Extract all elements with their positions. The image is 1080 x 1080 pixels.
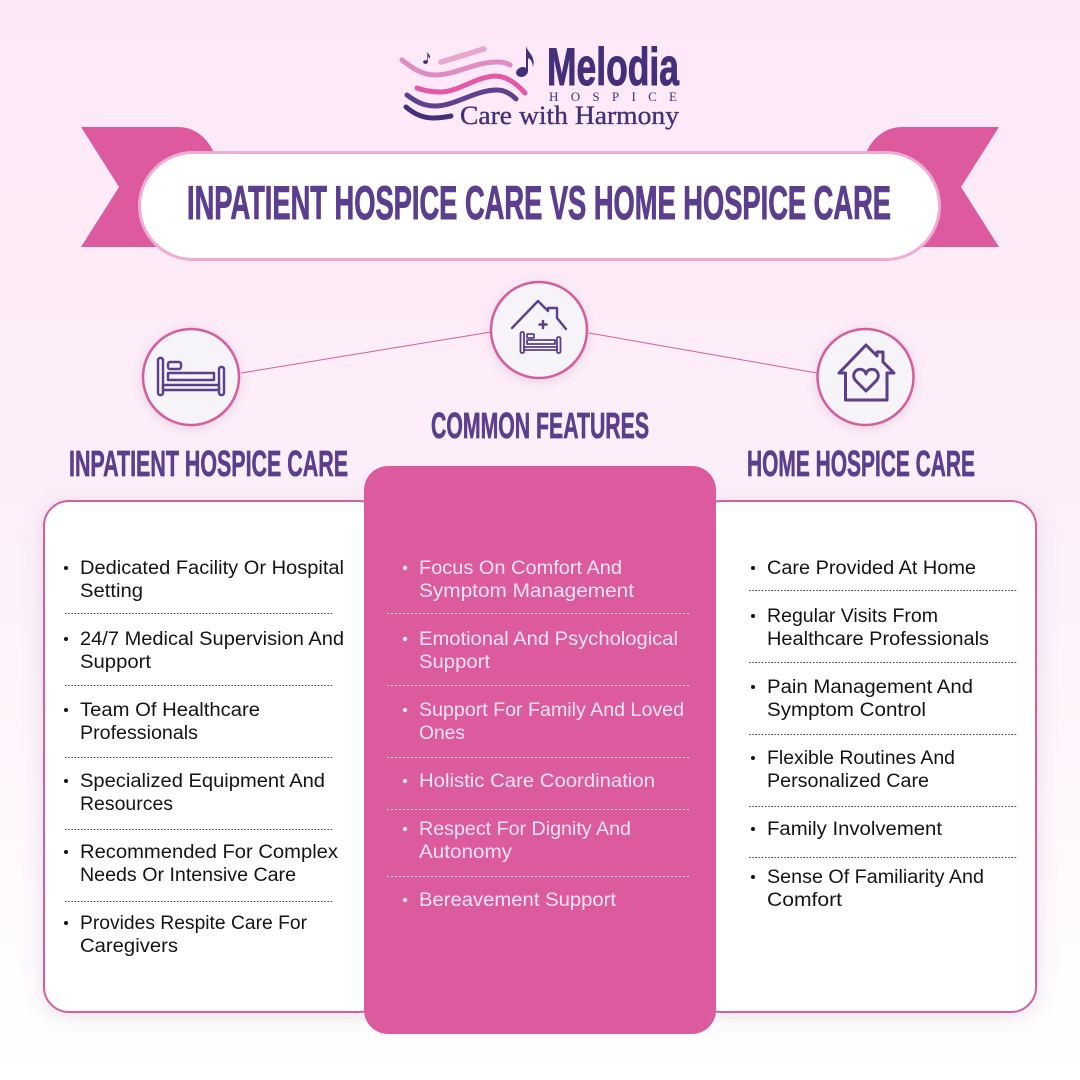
home list text: Regular Visits From bbox=[767, 606, 938, 627]
common list text: Symptom Management bbox=[419, 581, 635, 602]
common list text: Bereavement Support bbox=[419, 890, 617, 911]
connector lines bbox=[241, 332, 817, 373]
common list text: Emotional And Psychological bbox=[419, 629, 678, 650]
common bullets bbox=[403, 566, 407, 902]
inpatient list text: Specialized Equipment And bbox=[80, 771, 325, 792]
icon: house with medical bed bbox=[491, 282, 587, 378]
common list text: Support bbox=[419, 652, 491, 673]
common list text: Ones bbox=[419, 723, 465, 744]
home list text bbox=[767, 558, 989, 911]
logo: Melodia Hospice bbox=[402, 38, 679, 130]
heading: inpatient hospice care: INPATIENT HOSPICE CARE bbox=[69, 443, 348, 484]
inpatient list text: Team Of Healthcare bbox=[80, 700, 260, 721]
ribbon right bbox=[865, 127, 999, 247]
inpatient list text: Setting bbox=[80, 581, 143, 602]
logo wordmark: Melodia bbox=[547, 38, 679, 97]
home list text: Pain Management And bbox=[767, 677, 973, 698]
inpatient list text: Provides Respite Care For bbox=[80, 913, 308, 934]
home list dividers bbox=[749, 590, 1017, 858]
home list text: Care Provided At Home bbox=[767, 558, 976, 579]
inpatient list text: Professionals bbox=[80, 723, 198, 744]
inpatient list text bbox=[80, 558, 344, 957]
heading: common features: COMMON FEATURES bbox=[431, 405, 649, 446]
inpatient list dividers bbox=[65, 614, 332, 902]
common list text: Autonomy bbox=[419, 842, 513, 863]
common list text: Focus On Comfort And bbox=[419, 558, 622, 579]
home bullets bbox=[751, 566, 755, 879]
logo tagline: Care with Harmony bbox=[460, 101, 679, 130]
inpatient list text: Needs Or Intensive Care bbox=[80, 865, 296, 886]
panel: common features bbox=[364, 466, 716, 1034]
ribbon left bbox=[81, 127, 215, 247]
inpatient list text: Dedicated Facility Or Hospital bbox=[80, 558, 344, 579]
title pill bbox=[140, 152, 940, 260]
common list text: Respect For Dignity And bbox=[419, 819, 631, 840]
common list text: Holistic Care Coordination bbox=[419, 771, 655, 792]
common list dividers bbox=[387, 614, 689, 876]
logo waves and music notes bbox=[402, 46, 534, 118]
home list text: Personalized Care bbox=[767, 771, 929, 792]
home list text: Symptom Control bbox=[767, 700, 926, 721]
title banner bbox=[81, 127, 999, 260]
panel: home hospice care bbox=[696, 501, 1036, 1012]
inpatient list text: Resources bbox=[80, 794, 173, 815]
logo subtitle: Hospice: HOSPICE bbox=[549, 89, 677, 104]
home list text: Comfort bbox=[767, 890, 843, 911]
home list text: Sense Of Familiarity And bbox=[767, 867, 984, 888]
inpatient list text: 24/7 Medical Supervision And bbox=[80, 629, 344, 650]
inpatient list text: Caregivers bbox=[80, 936, 178, 957]
inpatient list text: Recommended For Complex bbox=[80, 842, 339, 863]
inpatient list text: Support bbox=[80, 652, 152, 673]
home list text: Flexible Routines And bbox=[767, 748, 955, 769]
inpatient bullets bbox=[64, 566, 68, 925]
panel: inpatient hospice care bbox=[44, 501, 384, 1012]
home list text: Healthcare Professionals bbox=[767, 629, 989, 650]
common list text bbox=[419, 558, 684, 911]
icon: house with heart bbox=[818, 329, 914, 425]
icon: hospital bed bbox=[143, 329, 239, 425]
home list text: Family Involvement bbox=[767, 819, 943, 840]
common list text: Support For Family And Loved bbox=[419, 700, 684, 721]
